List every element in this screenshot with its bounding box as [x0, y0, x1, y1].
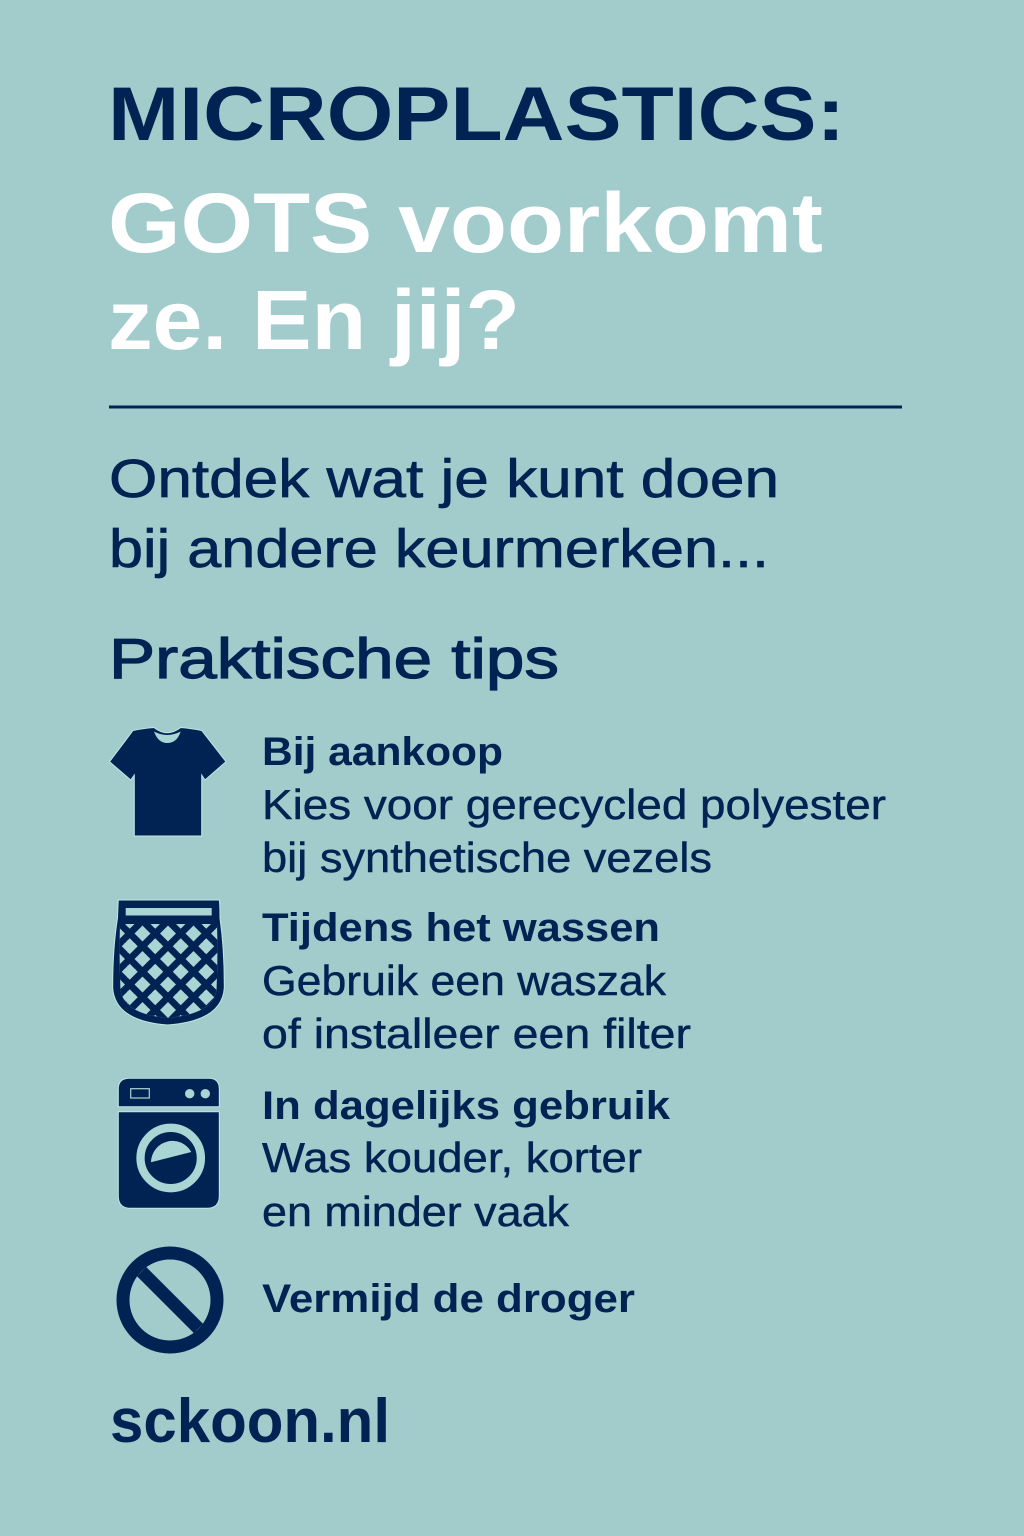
tip: tijdens het wassen: of installeer een filter [262, 1010, 691, 1057]
tip: in dagelijks gebruik: In dagelijks gebruik [262, 1084, 671, 1128]
icon: prohibited sign [123, 1253, 217, 1347]
title: GOTS voorkomt [108, 176, 823, 270]
tip: tijdens het wassen: Gebruik een waszak [262, 957, 667, 1004]
tip: in dagelijks gebruik: en minder vaak [262, 1188, 570, 1235]
icon: washing machine [118, 1078, 219, 1208]
tip: in dagelijks gebruik [262, 1084, 671, 1235]
tip: bij aankoop [262, 730, 886, 881]
tip: bij aankoop: Bij aankoop [262, 730, 503, 774]
icon: laundry net bag [113, 900, 224, 1025]
heading: practical tips: Praktische tips [109, 627, 559, 691]
tip: bij aankoop: Kies voor gerecycled polyester [262, 781, 886, 828]
subtitle: bij andere keurmerken... [109, 519, 769, 579]
icon: t-shirt [110, 728, 226, 836]
tip: tijdens het wassen [262, 906, 691, 1057]
subtitle [109, 449, 779, 579]
tip: bij aankoop: bij synthetische vezels [262, 834, 712, 881]
title: MICROPLASTICS: [108, 72, 845, 157]
tip: vermijd de droger: Vermijd de droger [262, 1277, 635, 1321]
tip: tijdens het wassen: Tijdens het wassen [262, 906, 660, 950]
subtitle: Ontdek wat je kunt doen [109, 449, 779, 509]
website: sckoon.nl [110, 1387, 390, 1456]
tip: in dagelijks gebruik: Was kouder, korter [262, 1134, 642, 1181]
title [108, 72, 845, 367]
title: ze. En jij? [108, 273, 520, 367]
